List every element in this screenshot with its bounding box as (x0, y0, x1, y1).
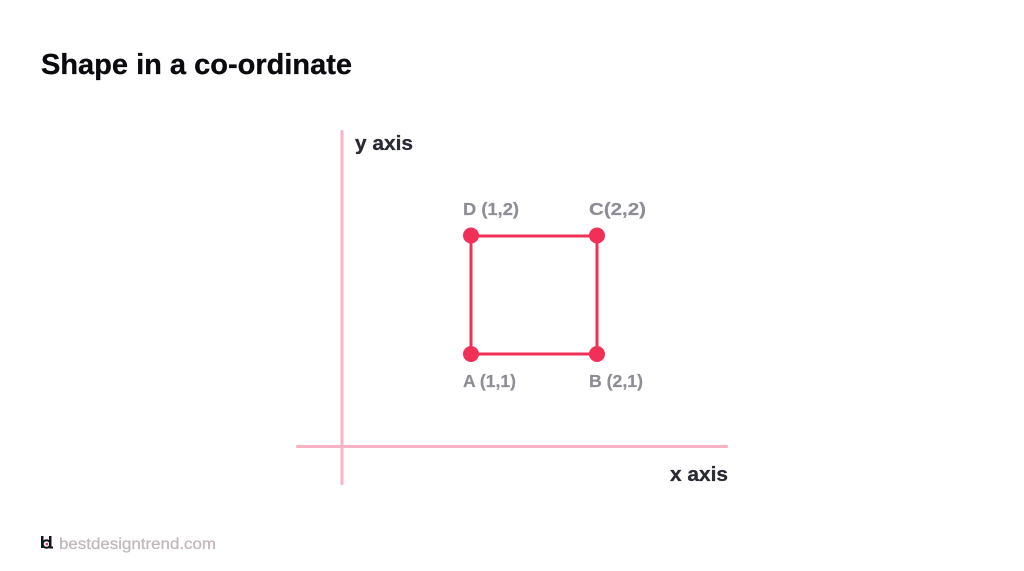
chart: coordinate plane with square (296, 130, 728, 486)
x axis line (296, 445, 728, 448)
point B (589, 346, 643, 391)
point C (589, 199, 646, 244)
title: Shape in a co-ordinate (41, 49, 352, 81)
point D: D (1,2) (463, 199, 519, 219)
point A (463, 346, 516, 391)
square shape (471, 236, 597, 354)
brand name: bestdesigntrend.com (59, 536, 216, 553)
point A: A (1,1) (463, 371, 516, 391)
x axis label: x axis (670, 464, 728, 486)
y axis label: y axis (355, 133, 413, 155)
footer brand (41, 536, 216, 553)
icon: brand logo (41, 536, 53, 548)
point C: C(2,2) (589, 199, 646, 219)
point D (463, 199, 519, 244)
point B: B (2,1) (589, 371, 643, 391)
y axis line (340, 130, 344, 485)
